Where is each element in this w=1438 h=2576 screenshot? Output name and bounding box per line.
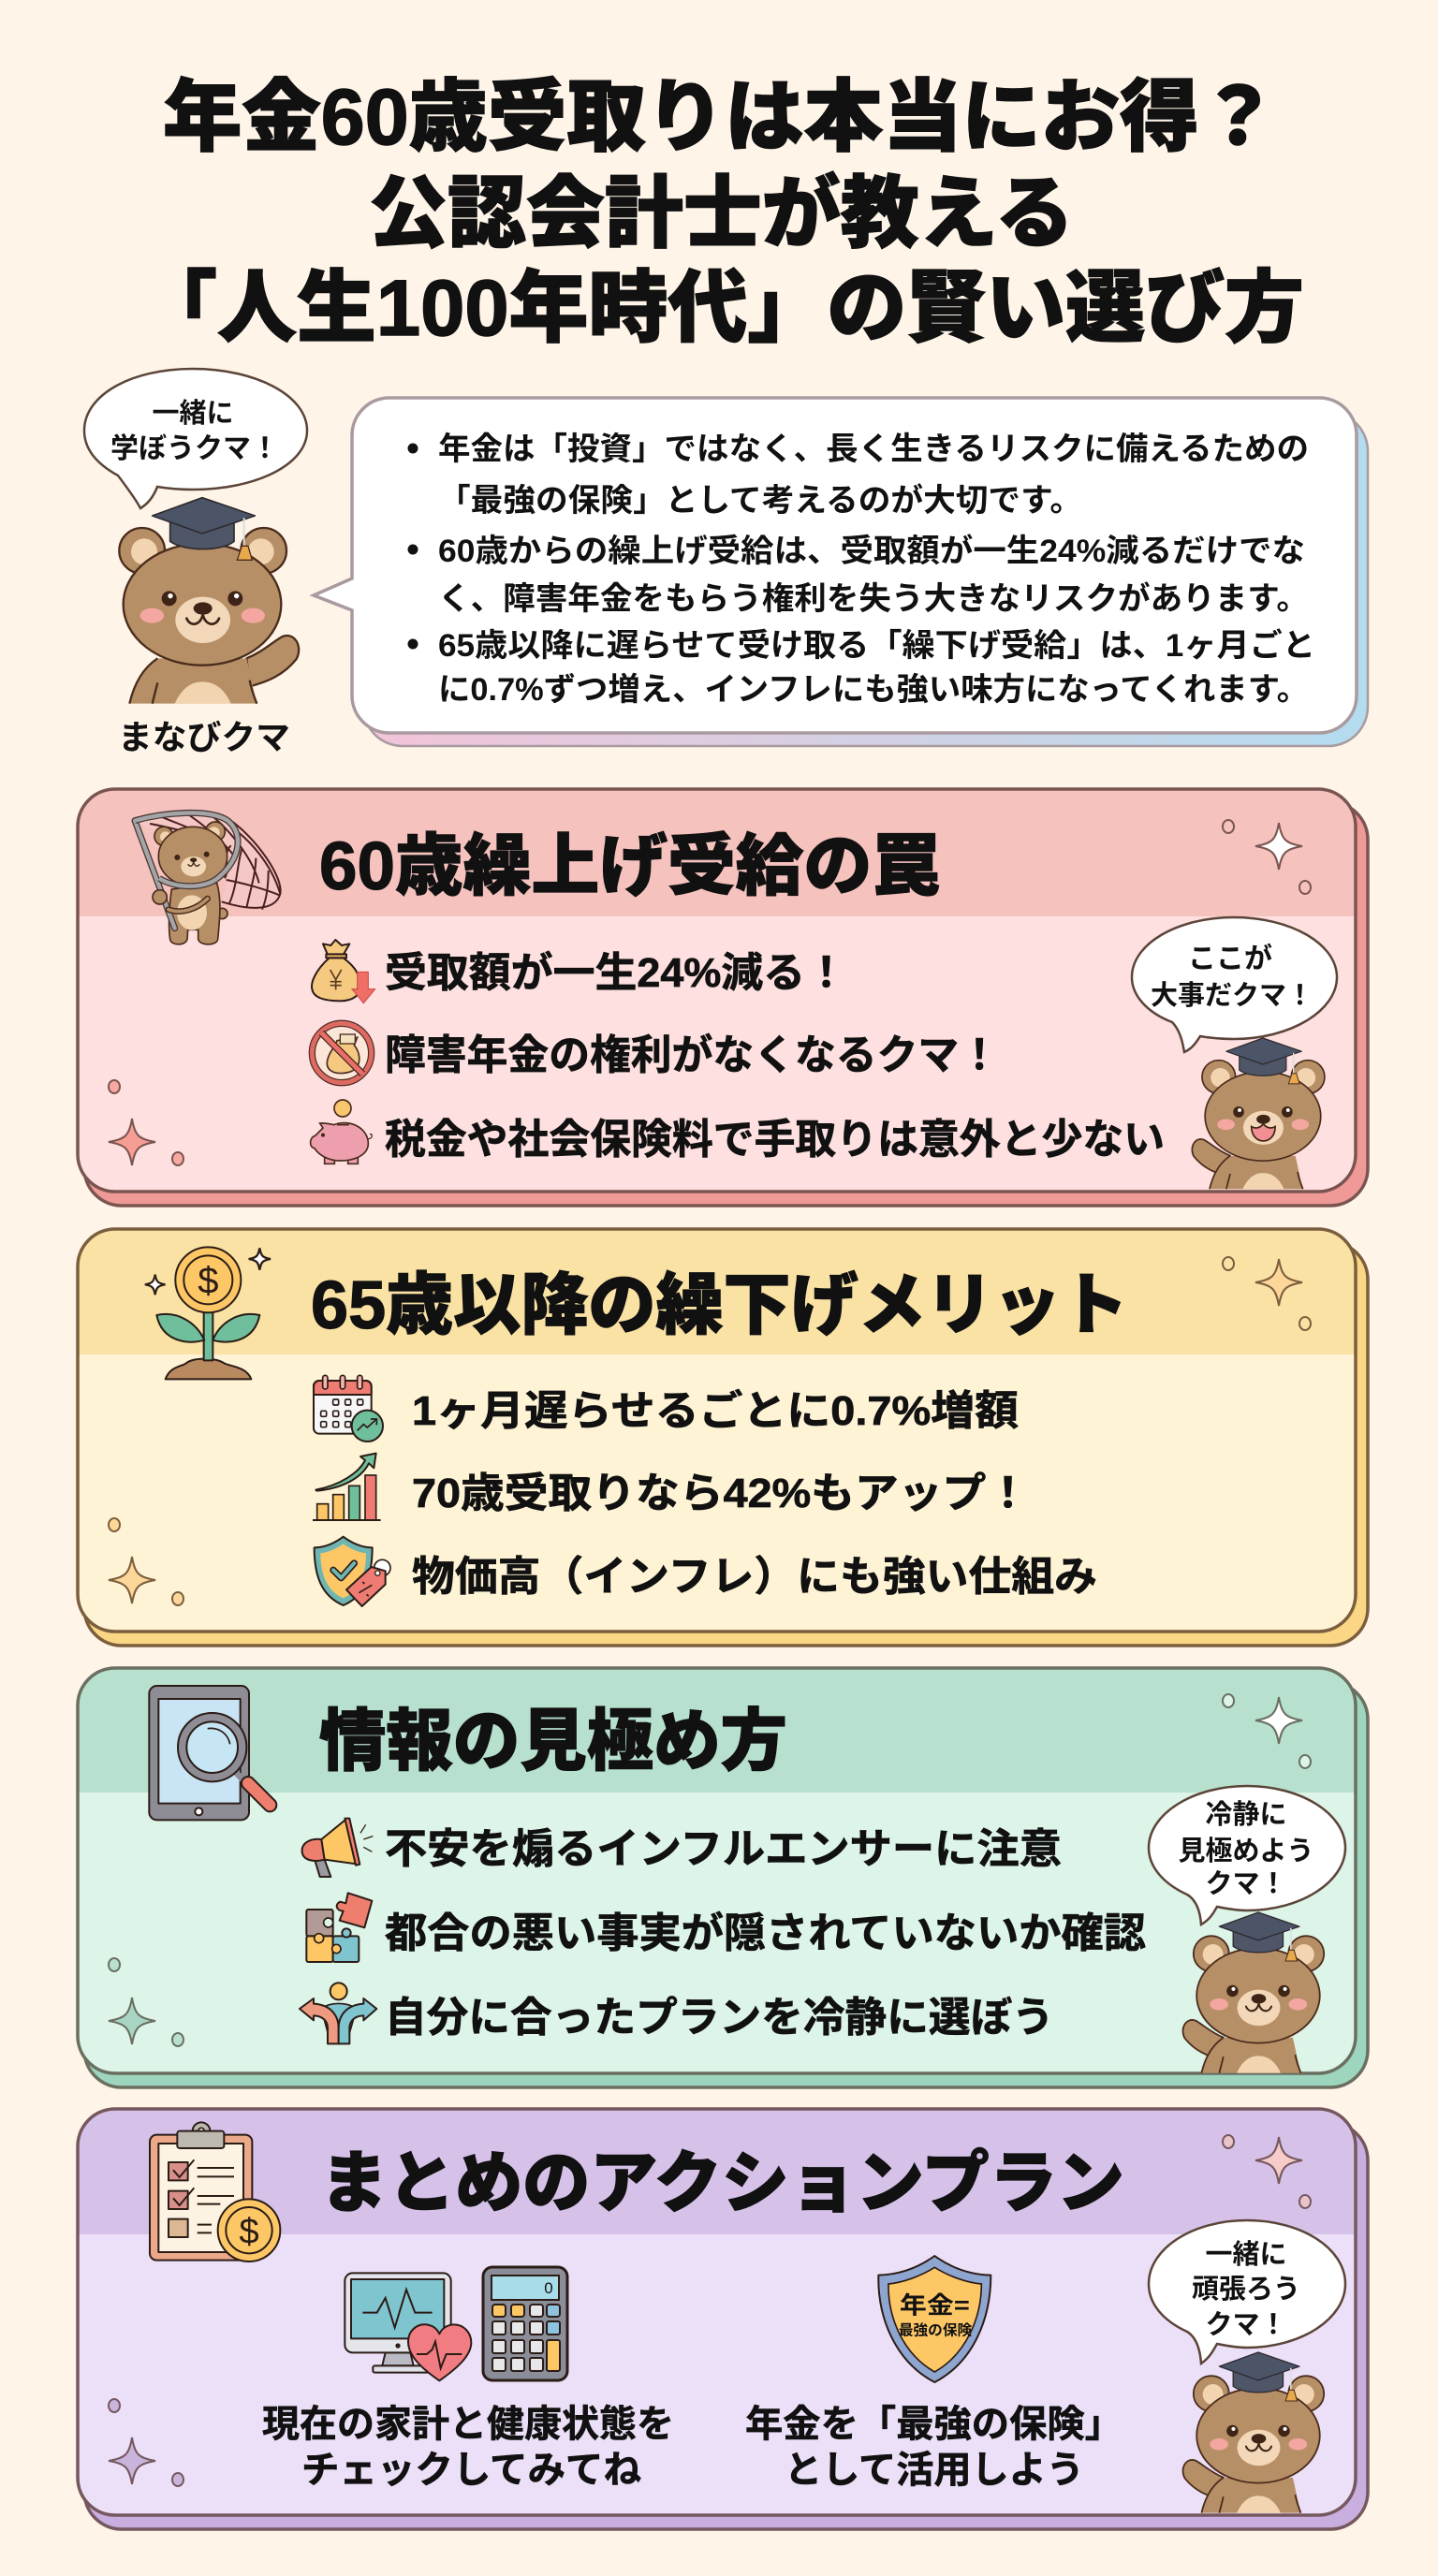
title: 公認会計士が教える	[369, 169, 1074, 257]
icon: main bear	[119, 498, 299, 704]
icon: piggy bank	[311, 1100, 372, 1164]
intro character: bear with speech bubble	[84, 369, 307, 756]
icon: checklist clipboard with coin: $	[239, 2212, 259, 2252]
icon: megaphone	[302, 1819, 373, 1877]
icon: pension shield	[878, 2256, 990, 2382]
action text: 現在の家計と健康状態を	[262, 2404, 674, 2445]
speech bubble: let's learn together	[84, 369, 307, 508]
icon: waving bear with bubble: 見極めよう	[1178, 1836, 1314, 1866]
bullet points text: 年金は「投資」ではなく、長く生きるリスクに備えるための	[438, 432, 1309, 467]
icon: waving bear with bubble: 頑張ろう	[1192, 2275, 1300, 2305]
icon: waving bear with bubble	[1149, 1786, 1345, 2073]
bullet points text: 65歳以降に遅らせて受け取る「繰下げ受給」は、1ヶ月ごと	[438, 628, 1315, 664]
action text	[262, 2404, 674, 2491]
icon: money plant: $	[198, 1261, 218, 1302]
item: tax and insurance: 税金や社会保険料で手取りは意外と少ない	[385, 1117, 1165, 1163]
icon: monitor with heart	[345, 2273, 471, 2380]
action text: チェックしてみてね	[301, 2450, 641, 2491]
bullet points text: 60歳からの繰上げ受給は、受取額が一生24%減るだけでな	[438, 533, 1305, 569]
icon: waving bear with bubble	[1132, 917, 1337, 1189]
bullet points text: に0.7%ずつ増え、インフレにも強い味方になってくれます。	[438, 672, 1309, 708]
panel: まとめのアクションプラン	[78, 2109, 1368, 2529]
bear name: まなびクマ	[118, 718, 290, 756]
panel: 情報の見極め方	[78, 1668, 1368, 2087]
title: 「人生100年時代」の賢い選び方	[138, 264, 1304, 352]
panel: 65歳以降の繰下げメリット	[78, 1229, 1368, 1646]
bullet points text: 「最強の保険」として考えるのが大切です。	[438, 482, 1082, 519]
icon: waving bear with bubble: ここが	[1188, 943, 1272, 974]
icon: checklist clipboard with coin	[150, 2122, 280, 2261]
action text	[745, 2404, 1123, 2491]
icon: puzzle	[306, 1893, 372, 1962]
heading: 情報の見極め方	[319, 1705, 787, 1779]
panel: key points bubble	[314, 398, 1368, 746]
item: hidden facts: 都合の悪い事実が隠されていないか確認	[385, 1910, 1146, 1956]
icon: tablet with magnifier	[149, 1686, 270, 1820]
bullet points text: く、障害年金をもらう権利を失う大きなリスクがあります。	[438, 580, 1309, 617]
icon: waving bear with bubble	[1149, 2220, 1345, 2513]
icon: bear with net	[134, 812, 281, 944]
item: choose calmly: 自分に合ったプランを冷静に選ぼう	[385, 1995, 1054, 2041]
item: lower benefit: 受取額が一生24%減る！	[385, 950, 847, 996]
item: 42 percent up: 70歳受取りなら42%もアップ！	[412, 1471, 1030, 1516]
icon: waving bear with bubble: 冷静に	[1205, 1799, 1287, 1830]
icon: waving bear with bubble: 一緒に	[1205, 2239, 1287, 2270]
icon: bar chart with arrow	[313, 1454, 381, 1520]
icon: waving bear with bubble: クマ！	[1205, 1869, 1287, 1899]
icon: waving bear with bubble: 大事だクマ！	[1151, 980, 1313, 1011]
icon: waving bear with bubble: クマ！	[1205, 2310, 1287, 2340]
item: influencer caution: 不安を煽るインフルエンサーに注意	[385, 1826, 1062, 1872]
action: use pension as insurance	[745, 2256, 1123, 2491]
icon: shield with price tag	[315, 1537, 390, 1606]
title: 年金60歳受取りは本当にお得？	[163, 73, 1278, 161]
icon: calculator: 0	[544, 2279, 553, 2297]
speech bubble: let's learn together: 学ぼうクマ！	[110, 433, 279, 464]
icon: person at crossroads	[300, 1983, 376, 2043]
action text: 年金を「最強の保険」	[745, 2404, 1123, 2445]
heading: まとめのアクションプラン	[320, 2146, 1124, 2221]
speech bubble: let's learn together: 一緒に	[152, 398, 234, 429]
icon: money bag with down arrow	[312, 940, 375, 1003]
icon: money plant	[145, 1247, 271, 1379]
action: check household and health	[262, 2267, 674, 2491]
heading: 65歳以降の繰下げメリット	[311, 1268, 1128, 1343]
heading: 60歳繰上げ受給の罠	[319, 829, 940, 904]
icon: calendar with growth	[314, 1375, 383, 1442]
icon: prohibited money	[312, 1023, 372, 1083]
item: inflation: 物価高（インフレ）にも強い仕組み	[412, 1554, 1097, 1600]
icon: calculator	[483, 2267, 567, 2380]
action text: として活用しよう	[785, 2450, 1084, 2491]
panel: 60歳繰上げ受給の罠	[78, 789, 1368, 1206]
item: disability pension: 障害年金の権利がなくなるクマ！	[385, 1032, 1000, 1078]
icon: pension shield: 年金=	[900, 2293, 970, 2320]
icon: pension shield: 最強の保険	[899, 2322, 973, 2338]
bullet points text	[408, 432, 1315, 708]
item: monthly increase: 1ヶ月遅らせるごとに0.7%増額	[412, 1388, 1019, 1434]
title	[138, 73, 1304, 352]
